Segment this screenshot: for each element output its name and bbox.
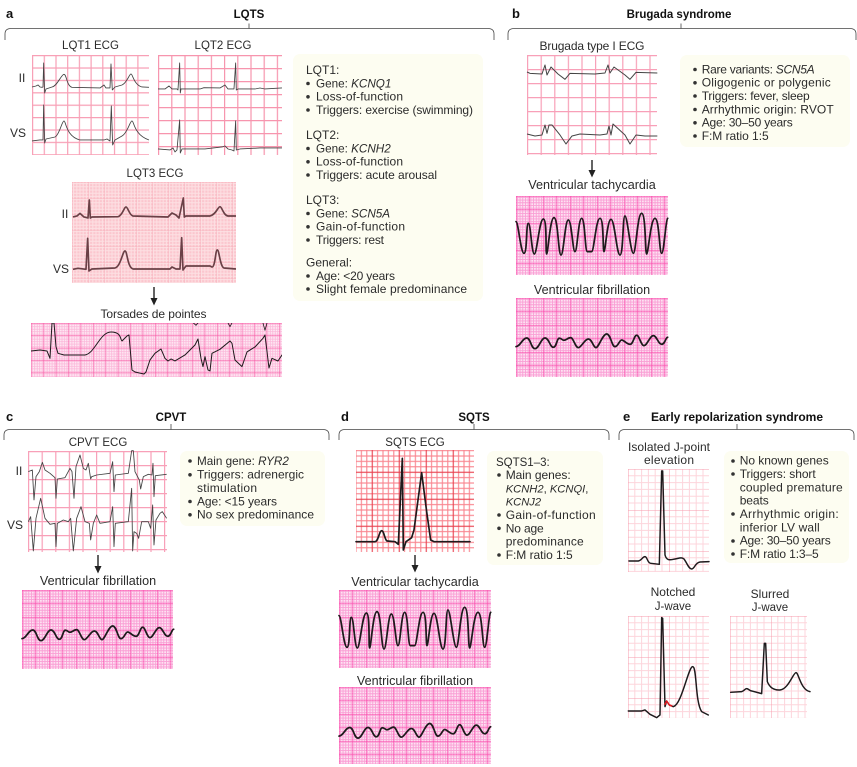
heading: SQTS: SQTS	[458, 412, 490, 424]
arrow: to ventricular fibrillation	[94, 555, 102, 574]
text box: Brugada details: Rare variants: SCN5A	[702, 62, 815, 76]
arrow: to ventricular tachycardia	[588, 160, 596, 178]
heading: CPVT: CPVT	[156, 412, 186, 424]
label: LQT2 ECG: LQT2 ECG	[195, 40, 251, 52]
bracket: Brugada syndrome	[508, 24, 856, 40]
label: Ventricular fibrillation: Ventricular fibrillation	[534, 283, 650, 297]
text box: CPVT details	[180, 451, 325, 526]
panel letter c: c	[6, 409, 13, 424]
general details: General:	[306, 256, 352, 270]
label: Isolated J-point elevation: elevation	[644, 453, 694, 467]
panel letter e: e	[623, 409, 630, 424]
text box: SQTS details: KCNH2, KCNQI,	[506, 483, 588, 495]
LQT1 details: Loss-of-function	[316, 90, 403, 104]
text box: CPVT details: stimulation	[197, 481, 257, 495]
chart: LQT2 ECG	[158, 55, 282, 155]
label: Isolated J-point elevation	[628, 440, 711, 467]
label: Slurred J-wave	[751, 587, 789, 614]
bracket: LQTS	[5, 24, 494, 40]
label: Notched J-wave	[651, 585, 695, 613]
text box: SQTS details: F:M ratio 1:5	[506, 548, 573, 562]
text box: early repolarization details	[724, 451, 849, 563]
text box: SQTS details: predominance	[506, 535, 584, 549]
text box: early repolarization details: Arrhythmic origin:	[740, 507, 839, 521]
text box: CPVT details: Triggers: adrenergic	[197, 468, 304, 482]
label: CPVT ECG: CPVT ECG	[69, 437, 127, 449]
lead labels: CPVT	[7, 464, 23, 532]
text box: early repolarization details: No known genes	[740, 454, 829, 468]
LQT3 details: Gene: SCN5A	[316, 207, 390, 220]
panel b: Brugada syndrome	[508, 6, 856, 377]
label: Ventricular fibrillation: Ventricular fibrillation	[357, 674, 473, 688]
LQT3 details: Gain-of-function	[316, 220, 405, 234]
text box: early repolarization details: Triggers: short	[740, 467, 816, 481]
heading: Early repolarization syndrome: Early repolarization syndrome	[651, 410, 823, 424]
lead labels: CPVT: VS	[7, 518, 23, 532]
general details: Age: <20 years	[316, 269, 395, 283]
heading: Brugada syndrome: Brugada syndrome	[627, 9, 731, 21]
LQT2 details: Gene: KCNH2	[316, 142, 391, 155]
LQT2 details	[306, 128, 437, 182]
panel letter d: d	[341, 409, 349, 424]
label: Isolated J-point elevation: Isolated J-point	[628, 440, 711, 454]
LQT1 details	[306, 63, 473, 117]
LQT1 details: LQT1:	[306, 63, 339, 77]
text box: SQTS details	[487, 451, 603, 565]
text box: SQTS details: Gain-of-function	[506, 508, 596, 522]
chart: SQTS ECG	[356, 450, 474, 552]
text box: early repolarization details: beats	[740, 494, 769, 508]
panel c: CPVT	[4, 409, 329, 669]
panel letter b: b	[512, 6, 520, 21]
general details: Slight female predominance	[316, 282, 467, 296]
label: Torsades de pointes: Torsades de pointes	[100, 307, 206, 321]
label: lead II: II	[19, 71, 25, 85]
chart: slurred J-wave	[730, 616, 810, 718]
label: Brugada type I ECG: Brugada type I ECG	[540, 39, 644, 53]
text box: SQTS details: No age	[506, 521, 544, 535]
label: Notched J-wave: J-wave	[655, 601, 691, 613]
panel d: SQTS	[339, 409, 609, 764]
text box: Brugada details: Triggers: fever, sleep	[702, 89, 810, 103]
text box: CPVT details: Age: <15 years	[197, 494, 277, 508]
label: LQT3 ECG: LQT3 ECG	[127, 168, 183, 180]
LQT1 details: Gene: KCNQ1	[316, 77, 391, 90]
text box: SQTS details: Main genes:	[506, 468, 571, 482]
text box: Brugada details: Arrhythmic origin: RVOT	[702, 102, 834, 116]
chart: isolated J-point elevation	[628, 469, 709, 572]
text box: early repolarization details: F:M ratio 1:3–5	[740, 547, 819, 561]
label: Slurred J-wave: Slurred	[751, 587, 789, 601]
chart: ventricular tachycardia	[516, 196, 668, 275]
chart: LQT3 ECG	[72, 182, 236, 283]
chart: ventricular fibrillation	[516, 298, 668, 377]
panel letter a: a	[6, 6, 14, 21]
bracket: CPVT	[4, 424, 329, 440]
lead labels: CPVT: II	[16, 464, 22, 478]
LQT1 details: Triggers: exercise (swimming)	[316, 103, 473, 117]
text box: early repolarization details: coupled premature	[740, 480, 843, 494]
lead labels: LQT3	[53, 207, 69, 276]
text box: SQTS details: KCNJ2	[506, 497, 542, 509]
panel a: LQTS	[5, 6, 494, 377]
notch highlight	[665, 701, 672, 706]
label: LQT1 ECG: LQT1 ECG	[62, 40, 119, 52]
arrow: to torsades de pointes	[150, 287, 158, 306]
text box: Brugada details: Oligogenic or polygenic	[702, 76, 831, 90]
heading: LQTS: LQTS	[234, 9, 265, 21]
label: SQTS ECG: SQTS ECG	[385, 437, 445, 449]
LQT3 details	[306, 193, 405, 247]
chart: ventricular fibrillation	[22, 590, 174, 669]
lead labels: LQT3: VS	[53, 262, 69, 276]
chart: ventricular fibrillation	[339, 687, 491, 764]
arrow: to ventricular tachycardia	[412, 555, 418, 572]
chart: CPVT ECG	[28, 451, 167, 552]
text box: Brugada details	[680, 55, 850, 147]
label: Notched J-wave: Notched	[651, 585, 695, 599]
chart: torsades de pointes	[31, 323, 282, 377]
label: Slurred J-wave: J-wave	[752, 602, 788, 614]
chart: Brugada type I ECG	[527, 55, 657, 155]
text box: Brugada details: Age: 30–50 years	[702, 116, 793, 130]
LQT2 details: Triggers: acute arousal	[316, 168, 437, 182]
chart: ventricular tachycardia	[339, 590, 491, 668]
text box: early repolarization details: inferior LV wall	[740, 520, 820, 534]
text box: CPVT details: Main gene: RYR2	[197, 455, 289, 468]
text box: CPVT details: No sex predominance	[197, 508, 314, 522]
label: Ventricular tachycardia: Ventricular tachycardia	[528, 178, 656, 192]
label: Ventricular tachycardia: Ventricular tachycardia	[351, 575, 479, 589]
LQT2 details: LQT2:	[306, 128, 339, 142]
label: Ventricular fibrillation: Ventricular fibrillation	[40, 574, 156, 588]
text box: SQTS details: SQTS1–3:	[496, 457, 550, 469]
label: lead VS: VS	[10, 126, 26, 140]
LQT3 details: Triggers: rest	[316, 233, 385, 247]
text box: early repolarization details: Age: 30–50 years	[740, 534, 831, 548]
chart: LQT1 ECG	[32, 55, 149, 155]
LQT2 details: Loss-of-function	[316, 155, 403, 169]
bracket: Early repolarization syndrome	[619, 424, 854, 440]
panel e: Early repolarization syndrome	[619, 409, 854, 718]
bracket: SQTS	[339, 424, 609, 440]
lead labels: LQT3: II	[62, 207, 68, 221]
text box: LQTS details	[293, 54, 483, 301]
text box: Brugada details: F:M ratio 1:5	[702, 129, 769, 143]
chart: notched J-wave	[628, 616, 709, 718]
general details	[306, 256, 467, 296]
LQT3 details: LQT3:	[306, 193, 339, 207]
